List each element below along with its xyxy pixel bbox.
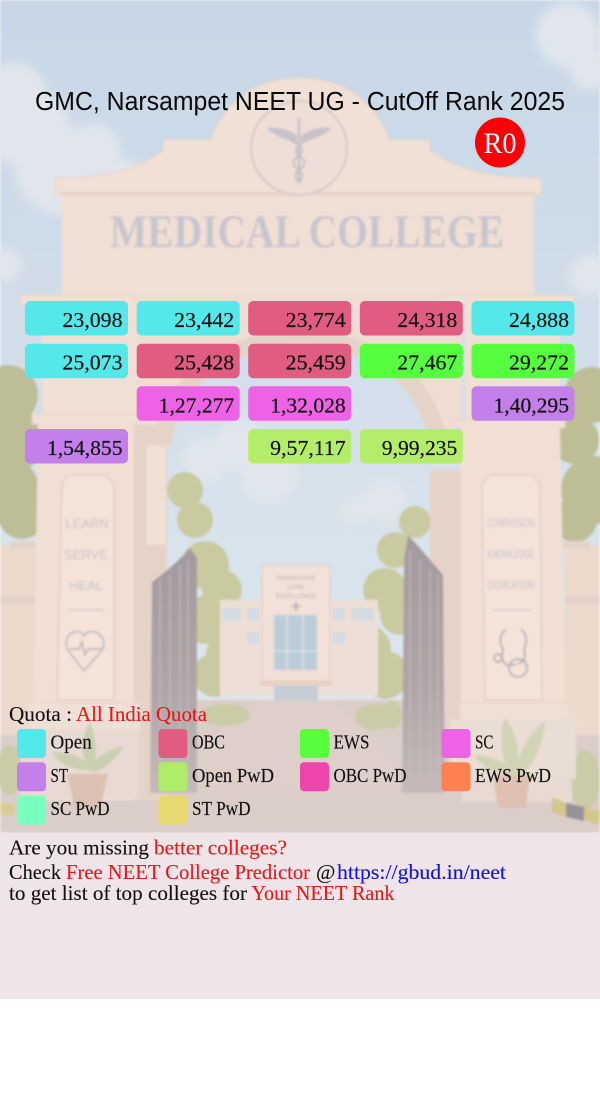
rank cell: 29,272 EWS bbox=[472, 344, 574, 378]
left plate bbox=[57, 475, 114, 700]
rank cell: 25,428 OBC bbox=[137, 344, 240, 378]
rank cell: 1,40,295 ST bbox=[472, 386, 574, 421]
side walls bbox=[0, 541, 600, 745]
top ledges bbox=[20, 295, 135, 305]
rank cell: 25,459 OBC: 25,459 bbox=[286, 351, 346, 375]
left plate: LEARN bbox=[65, 516, 109, 531]
sky bbox=[0, 0, 600, 700]
legend item: OBC bbox=[158, 729, 225, 758]
legend item: SC PwD bbox=[17, 796, 110, 825]
legend item: EWS bbox=[300, 729, 370, 758]
right plate: DEDICATION bbox=[488, 578, 534, 592]
main gate structure: MEDICAL COLLEGE bbox=[110, 206, 504, 258]
quota line: Quota : bbox=[9, 702, 72, 726]
legend item: ST PwD: ST PwD bbox=[192, 798, 250, 820]
rank cell: 1,27,277 SC bbox=[137, 386, 240, 421]
legend item: SC PwD: SC PwD bbox=[50, 798, 110, 820]
rank cell: 23,098 Open: 23,098 bbox=[62, 308, 122, 332]
rank cell: 25,428 OBC: 25,428 bbox=[174, 351, 234, 375]
distant building: CARE bbox=[288, 585, 304, 591]
rank cell: 23,774 OBC bbox=[248, 301, 351, 336]
rank cell: 9,57,117 Open PwD: 9,57,117 bbox=[270, 436, 346, 460]
rank cell: 23,442 Open: 23,442 bbox=[174, 308, 234, 332]
legend item: OBC PwD: OBC PwD bbox=[334, 765, 406, 787]
pediment bbox=[62, 195, 534, 300]
rank cell: 27,467 EWS bbox=[360, 344, 463, 378]
background illustration: medical college gate bbox=[0, 0, 600, 833]
title: GMC, Narsampet NEET UG - CutOff Rank 2025 bbox=[35, 88, 565, 116]
legend item: ST PwD bbox=[158, 796, 250, 825]
rank cell: 9,57,117 Open PwD bbox=[248, 429, 351, 464]
rank cell: 1,32,028 SC: 1,32,028 bbox=[270, 393, 346, 417]
quota line: All India Quota bbox=[76, 702, 208, 726]
rank cell: 24,888 Open bbox=[472, 301, 574, 336]
rank cell: 24,318 OBC bbox=[360, 301, 463, 336]
legend item: SC: SC bbox=[475, 732, 494, 754]
promo line 2: https://gbud.in/neet bbox=[337, 860, 506, 884]
right pier bbox=[465, 300, 560, 420]
ground bbox=[0, 700, 600, 833]
legend item: Open bbox=[17, 729, 92, 758]
rank cell: 24,318 OBC: 24,318 bbox=[397, 308, 457, 332]
promo line 3: Your NEET Rank bbox=[252, 881, 395, 905]
rank cell: 1,54,855 ST bbox=[25, 429, 128, 464]
rank cell: 23,442 Open bbox=[137, 301, 240, 336]
left plate: HEAL bbox=[69, 578, 103, 593]
legend item: EWS: EWS bbox=[334, 732, 370, 754]
legend item: ST bbox=[17, 762, 68, 791]
rank cell: 29,272 EWS: 29,272 bbox=[509, 351, 569, 375]
pier bases bbox=[28, 703, 140, 730]
distant building: EXCELLENCE bbox=[276, 594, 316, 600]
promo line 2: Free NEET College Predictor bbox=[66, 860, 310, 884]
rank cell: 25,073 Open: 25,073 bbox=[62, 351, 122, 375]
right plate bbox=[482, 475, 542, 700]
potted plants bbox=[52, 718, 545, 808]
promo line 3: to get list of top colleges for bbox=[9, 881, 247, 905]
main gate structure bbox=[20, 78, 576, 802]
legend item: OBC: OBC bbox=[192, 732, 225, 754]
rank cell: 9,99,235 Open PwD: 9,99,235 bbox=[382, 436, 457, 460]
rank cell: 1,54,855 ST: 1,54,855 bbox=[47, 436, 122, 460]
legend item: ST: ST bbox=[50, 765, 68, 787]
right plate: KNOWLEDGE bbox=[488, 547, 534, 561]
promo line 2: Check bbox=[9, 860, 61, 884]
rank cell: 25,073 Open bbox=[25, 344, 128, 378]
legend item: EWS PwD: EWS PwD bbox=[475, 765, 551, 787]
clouds bbox=[0, 3, 600, 523]
rank cell: 24,888 Open: 24,888 bbox=[509, 308, 569, 332]
panel: cutoff rank grid bbox=[25, 301, 574, 464]
rank cell: 23,098 Open bbox=[25, 301, 128, 336]
right plate: COMPASSION bbox=[488, 516, 534, 530]
left plate: SERVE bbox=[64, 547, 108, 562]
rank cell: 1,27,277 SC: 1,27,277 bbox=[159, 393, 234, 417]
legend item: EWS PwD bbox=[442, 762, 551, 791]
promo line 2: @ bbox=[316, 860, 335, 884]
distant building: KNOWLEDGE bbox=[276, 576, 316, 582]
emblem bbox=[251, 101, 347, 195]
promo line 1: better colleges? bbox=[154, 836, 287, 860]
left pier bbox=[42, 300, 137, 420]
panel: predictor promo bbox=[0, 833, 600, 999]
far side trees bbox=[0, 365, 600, 542]
iron gates bbox=[150, 535, 445, 793]
round badge: R0 bbox=[475, 118, 525, 168]
distant building bbox=[220, 565, 378, 708]
round badge: R0: R0 bbox=[484, 127, 516, 160]
arch band bbox=[135, 296, 462, 440]
rank cell: 9,99,235 Open PwD bbox=[360, 429, 463, 464]
legend item: Open PwD: Open PwD bbox=[192, 765, 274, 787]
shrubs bbox=[0, 701, 600, 810]
rank cell: 27,467 EWS: 27,467 bbox=[397, 351, 458, 375]
rank cell: 25,459 OBC bbox=[248, 344, 351, 378]
legend item: Open PwD bbox=[158, 762, 274, 791]
legend item: Open: Open bbox=[50, 732, 92, 754]
promo line 1: Are you missing bbox=[9, 836, 150, 860]
rank cell: 1,32,028 SC bbox=[248, 386, 351, 421]
rank cell: 1,40,295 ST: 1,40,295 bbox=[494, 393, 569, 417]
rank cell: 23,774 OBC: 23,774 bbox=[286, 308, 346, 332]
legend item: OBC PwD bbox=[300, 762, 406, 791]
curbs bbox=[552, 797, 600, 825]
legend item: SC bbox=[442, 729, 494, 758]
legend bbox=[17, 729, 551, 825]
